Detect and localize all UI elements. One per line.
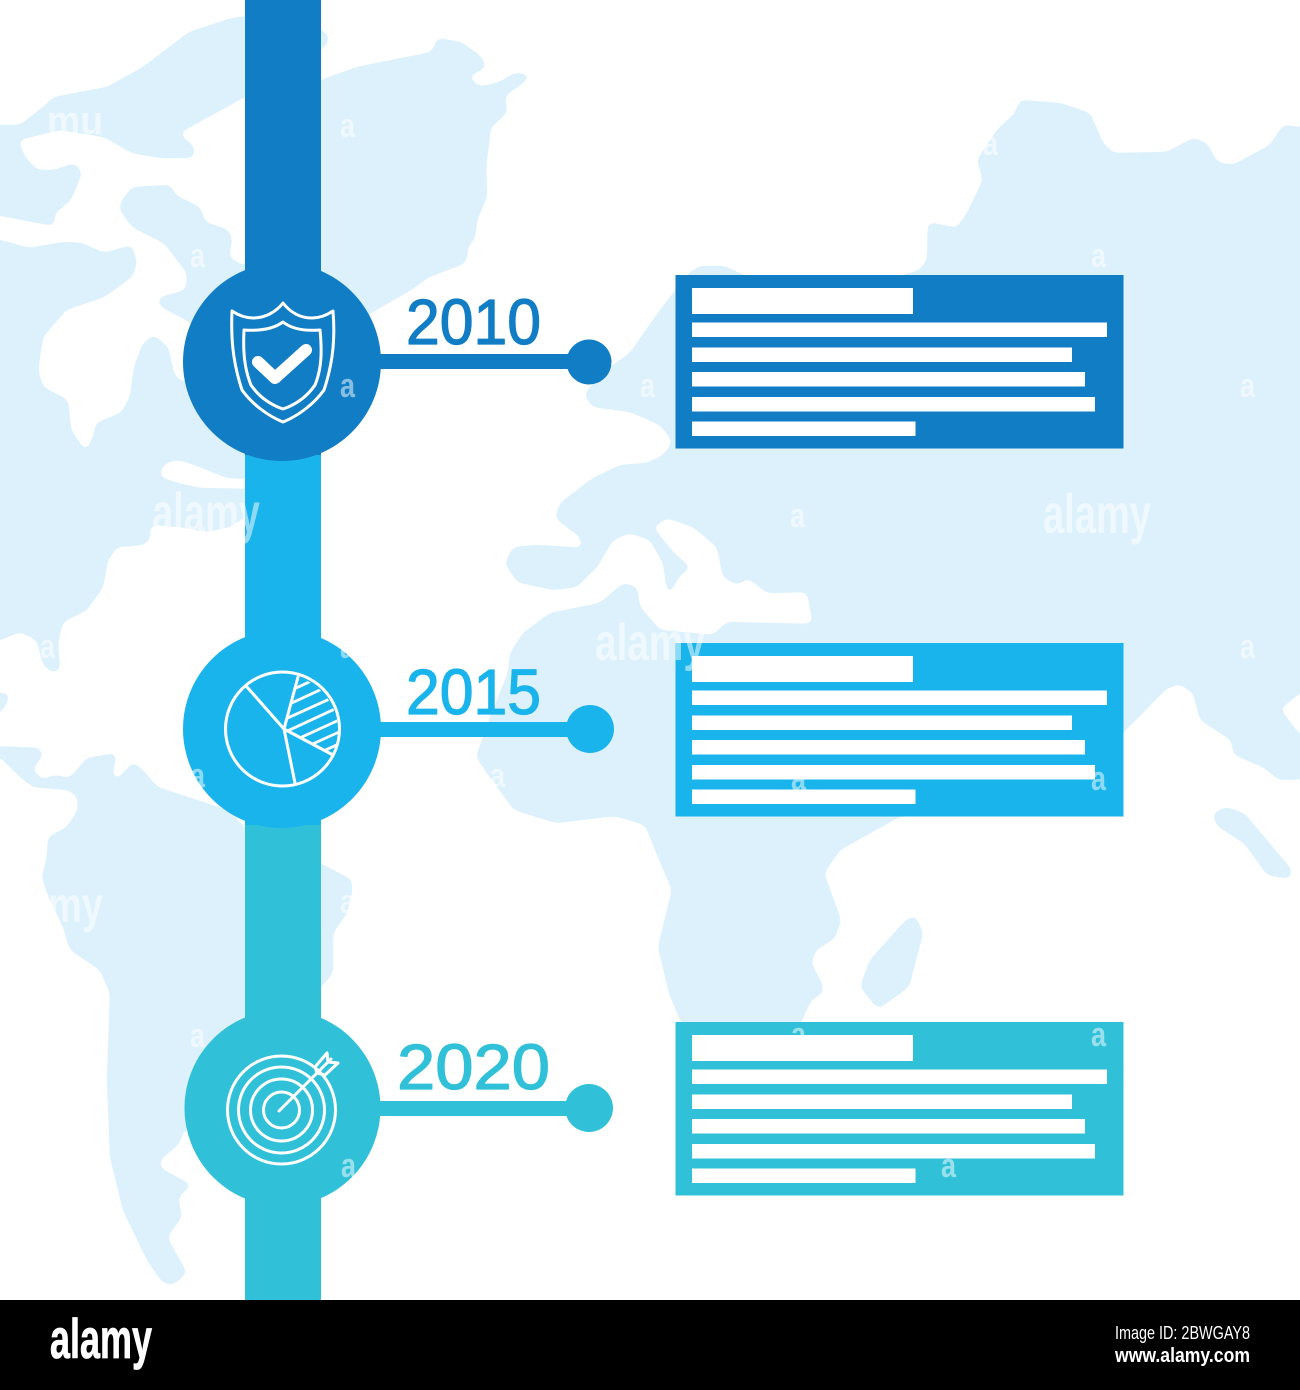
connector 2020 xyxy=(375,1084,613,1132)
stock watermarks: a xyxy=(340,628,356,666)
panel: 2020 text box xyxy=(676,1022,1124,1196)
stock watermarks: a xyxy=(1091,237,1107,275)
stock watermarks: a xyxy=(340,107,356,145)
milestone 2020 xyxy=(184,1010,613,1206)
stock watermarks: a xyxy=(791,1016,807,1054)
stock watermarks: my xyxy=(48,877,103,933)
timeline vertical bar xyxy=(245,0,321,1300)
stock watermarks: a xyxy=(341,1147,357,1185)
stock watermarks: a xyxy=(1091,760,1107,798)
image id: Image ID: 2BWGAY8 xyxy=(1115,1323,1250,1343)
milestone 2015 xyxy=(183,630,614,828)
year 2015: 2015 xyxy=(406,656,541,728)
connector 2015 xyxy=(375,705,614,753)
placeholder text bars 2015 xyxy=(692,656,1107,804)
map: arctic islands xyxy=(0,16,330,226)
icon: target with arrow xyxy=(228,1053,338,1164)
stock watermarks: alamy xyxy=(1043,482,1151,545)
node circle 2010 xyxy=(183,263,381,461)
footer bar xyxy=(0,1300,1300,1390)
footer logo: alamy xyxy=(50,1307,152,1370)
stock watermarks: a xyxy=(190,1017,206,1055)
placeholder text bars 2010 xyxy=(692,288,1107,436)
stock watermarks: a xyxy=(983,125,999,163)
node circle 2020 xyxy=(184,1010,380,1206)
map: australia island xyxy=(1213,807,1292,879)
stock watermarks: a xyxy=(190,757,206,795)
stock watermarks: a xyxy=(190,237,206,275)
stock watermarks xyxy=(40,99,1256,1185)
stock watermarks: a xyxy=(640,367,656,405)
stock watermarks: a xyxy=(340,883,356,921)
map: north america xyxy=(0,38,532,673)
map: south america xyxy=(0,745,352,1285)
stock watermarks: a xyxy=(791,760,807,798)
panel: 2015 text box xyxy=(676,643,1124,816)
map: madagascar xyxy=(860,915,923,1009)
stock watermarks: a xyxy=(1240,628,1256,666)
stock watermarks: mu xyxy=(47,99,103,143)
year 2020: 2020 xyxy=(397,1031,550,1103)
icon: pie chart xyxy=(226,672,350,786)
stock watermarks: a xyxy=(40,628,56,666)
stock watermarks: a xyxy=(490,757,506,795)
stock watermarks: a xyxy=(340,367,356,405)
map: small coastal island xyxy=(0,693,10,720)
stock watermarks: a xyxy=(1091,1016,1107,1054)
stock watermarks: a xyxy=(1240,367,1256,405)
panel: 2010 text box xyxy=(676,275,1124,448)
stock watermarks: a xyxy=(790,497,806,535)
node circle 2015 xyxy=(183,630,381,828)
year 2010: 2010 xyxy=(406,286,541,358)
stock watermarks: alamy xyxy=(595,614,705,672)
stock watermarks: a xyxy=(941,1147,957,1185)
stock watermarks: alamy xyxy=(152,481,260,544)
connector 2010 xyxy=(375,340,612,384)
placeholder text bars 2020 xyxy=(692,1035,1107,1183)
icon: shield with check xyxy=(232,303,334,422)
website: www.alamy.com xyxy=(1114,1345,1250,1367)
milestone 2010 xyxy=(183,263,612,461)
map: eurasia and africa xyxy=(476,100,1300,1025)
